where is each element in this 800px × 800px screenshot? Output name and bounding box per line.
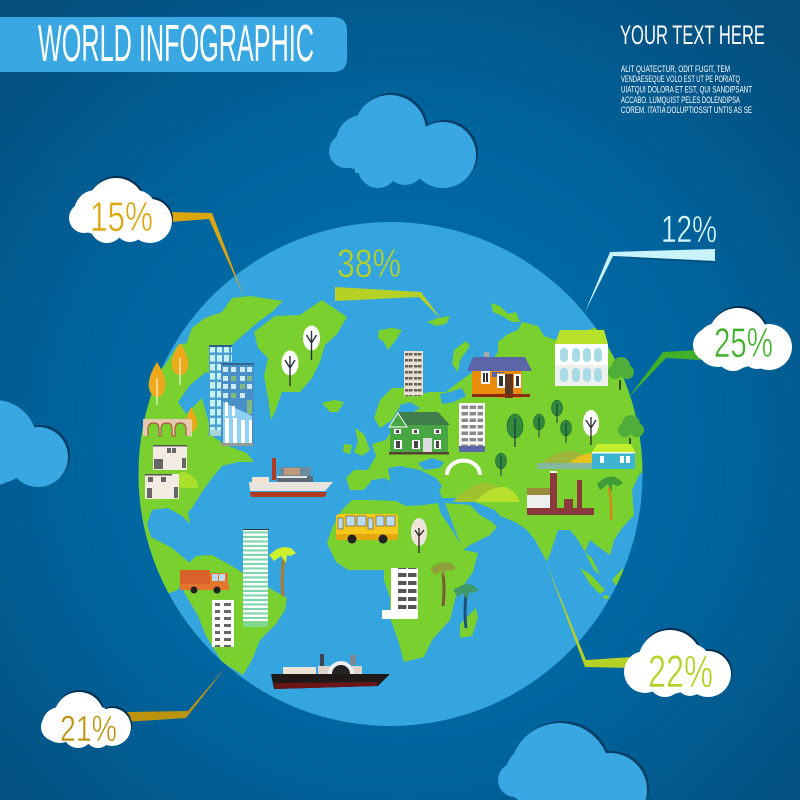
icon: beige tree <box>411 518 427 553</box>
icon: orange house <box>467 352 532 398</box>
globe <box>130 222 680 726</box>
pointer: 38% <box>335 287 441 319</box>
Arctic Russia islands <box>427 303 520 326</box>
South America <box>180 555 287 675</box>
label: 21%: 21% <box>60 708 117 749</box>
decorative cloud: left <box>0 400 70 487</box>
decorative cloud: bottom <box>498 721 649 800</box>
icon: palm east Asia <box>597 477 623 520</box>
Greenland <box>254 300 347 420</box>
callout: 25% <box>628 306 792 398</box>
side paragraph: ALIT QUATECTUR, ODIT FUGIT, TEM <box>621 64 730 74</box>
continents <box>130 296 680 675</box>
inland seas <box>388 388 466 498</box>
label: 38%: 38% <box>337 242 401 286</box>
icon: green house <box>389 412 450 454</box>
decorative cloud: top <box>329 93 478 188</box>
Madagascar <box>460 608 478 638</box>
Iceland <box>322 400 344 412</box>
icon: white building <box>212 600 234 647</box>
callout: 22% <box>546 562 732 697</box>
icon: rainbow arch <box>447 461 480 475</box>
icon: white trees in Greenland <box>282 326 320 386</box>
icon: yellow bus <box>336 514 398 544</box>
label: 22%: 22% <box>648 646 713 697</box>
side paragraph: ACCABO. LUMQUIST PELES DOLENDIPSA <box>621 95 740 105</box>
Africa <box>327 500 478 662</box>
icon: striped skyscraper <box>243 529 269 627</box>
icon: dark green trees <box>496 400 572 476</box>
North America <box>138 343 254 594</box>
Novaya Zemlya <box>452 341 470 372</box>
icon: white apartment block <box>459 403 485 452</box>
Svalbard <box>378 328 402 350</box>
label: 25%: 25% <box>714 319 773 366</box>
ocean <box>138 222 642 726</box>
icon: palm teal <box>453 584 479 628</box>
label: 12%: 12% <box>661 209 717 251</box>
icon: glass towers <box>209 345 254 446</box>
icon: white houses <box>145 445 198 499</box>
icon: green round trees <box>608 357 644 444</box>
icons: autumn trees <box>149 343 197 437</box>
callout: 21% <box>41 667 226 749</box>
icon: orange truck <box>180 570 229 594</box>
icon: white tree <box>583 410 599 445</box>
icon: palm yellow <box>269 547 296 596</box>
side paragraph <box>621 64 752 115</box>
Eurasia <box>346 322 642 562</box>
icon: teal house and fields <box>537 444 635 469</box>
icon: tan tower <box>404 351 423 396</box>
icon: cargo ship <box>249 458 333 497</box>
title banner: WORLD INFOGRAPHIC <box>38 15 314 73</box>
icon: paddle steamer <box>271 654 390 689</box>
title banner <box>0 15 347 73</box>
icon: palm olive <box>430 562 456 606</box>
label: 15%: 15% <box>90 193 153 240</box>
icon: viaduct <box>143 419 191 436</box>
icon: factory <box>527 471 594 515</box>
icon: white mansion <box>555 330 608 386</box>
callout: 12% <box>585 209 717 312</box>
Arabia <box>445 503 497 550</box>
side text block <box>620 20 765 115</box>
icon: hills <box>453 483 520 502</box>
Arctic islands <box>186 296 283 345</box>
Southeast Asia islands <box>580 552 625 599</box>
UK and Ireland <box>343 428 370 456</box>
icon: white office <box>382 568 418 619</box>
callout: 15% <box>69 176 244 297</box>
